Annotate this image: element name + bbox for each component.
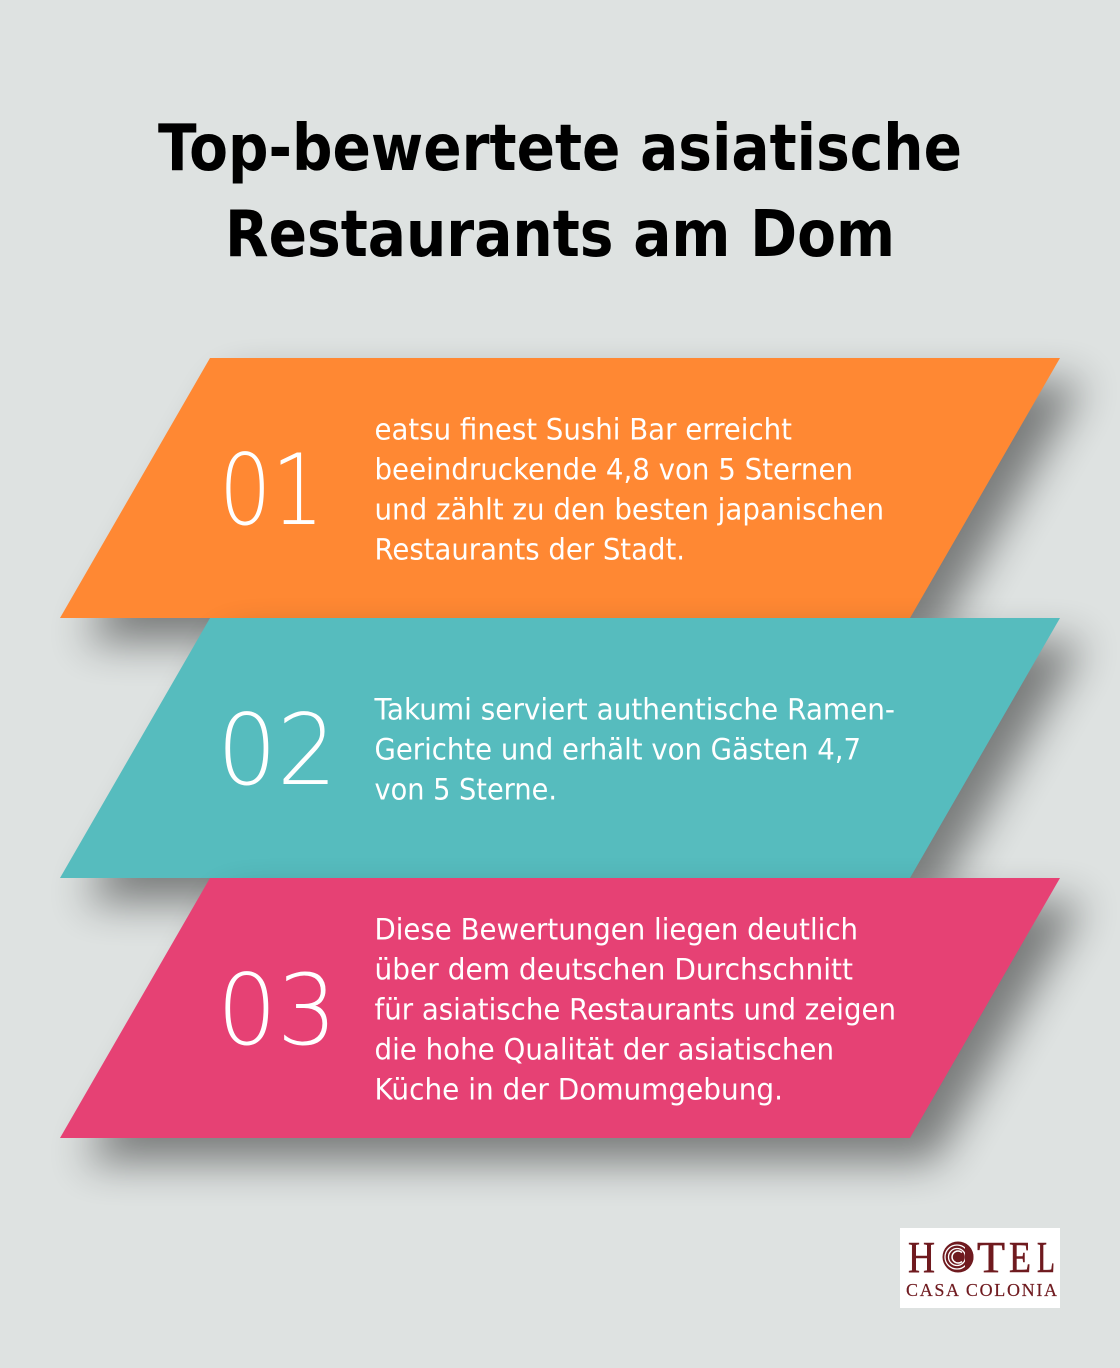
panel: step 01 — [60, 358, 1084, 642]
title: Top-bewertete asiatische — [158, 112, 962, 186]
step 03 text: Diese Bewertungen liegen deutlich — [374, 912, 858, 946]
number 03: 03 — [217, 954, 337, 1068]
logo: Hotel Casa Colonia: E — [1009, 1233, 1031, 1282]
step 01 text: beeindruckende 4,8 von 5 Sternen — [374, 452, 853, 486]
step 02 text: Takumi serviert authentische Ramen- — [374, 692, 895, 726]
logo: Hotel Casa Colonia: CASA COLONIA — [906, 1280, 1057, 1300]
step 03 text — [374, 912, 896, 1106]
icon: logo circle — [942, 1242, 974, 1272]
step 01 text — [374, 412, 884, 566]
logo: Hotel Casa Colonia: H — [908, 1233, 935, 1282]
number 02: 02 — [217, 694, 337, 808]
logo: Hotel Casa Colonia: L — [1037, 1233, 1055, 1282]
step 01 text: Restaurants der Stadt. — [374, 532, 685, 566]
step 03 text: für asiatische Restaurants und zeigen — [374, 992, 896, 1026]
step 03 text: Küche in der Domumgebung. — [374, 1072, 783, 1106]
orange parallelogram — [60, 358, 1060, 618]
step 03 text: über dem deutschen Durchschnitt — [374, 952, 853, 986]
pink parallelogram — [60, 878, 1060, 1138]
panel: step 03 — [60, 878, 1084, 1162]
step 01 text: eatsu finest Sushi Bar erreicht — [374, 412, 792, 446]
panel: step 02 — [60, 618, 1084, 902]
step 02 text: Gerichte und erhält von Gästen 4,7 — [374, 732, 861, 766]
number 01: 01 — [219, 434, 324, 548]
step 02 text — [374, 692, 895, 806]
teal parallelogram — [60, 618, 1060, 878]
step 01 text: und zählt zu den besten japanischen — [374, 492, 884, 526]
title — [158, 112, 962, 272]
step 02 text: von 5 Sterne. — [374, 772, 557, 806]
step 03 text: die hohe Qualität der asiatischen — [374, 1032, 834, 1066]
logo: Hotel Casa Colonia: T — [977, 1233, 1005, 1282]
logo: Hotel Casa Colonia — [900, 1228, 1060, 1308]
title: Restaurants am Dom — [225, 198, 895, 272]
